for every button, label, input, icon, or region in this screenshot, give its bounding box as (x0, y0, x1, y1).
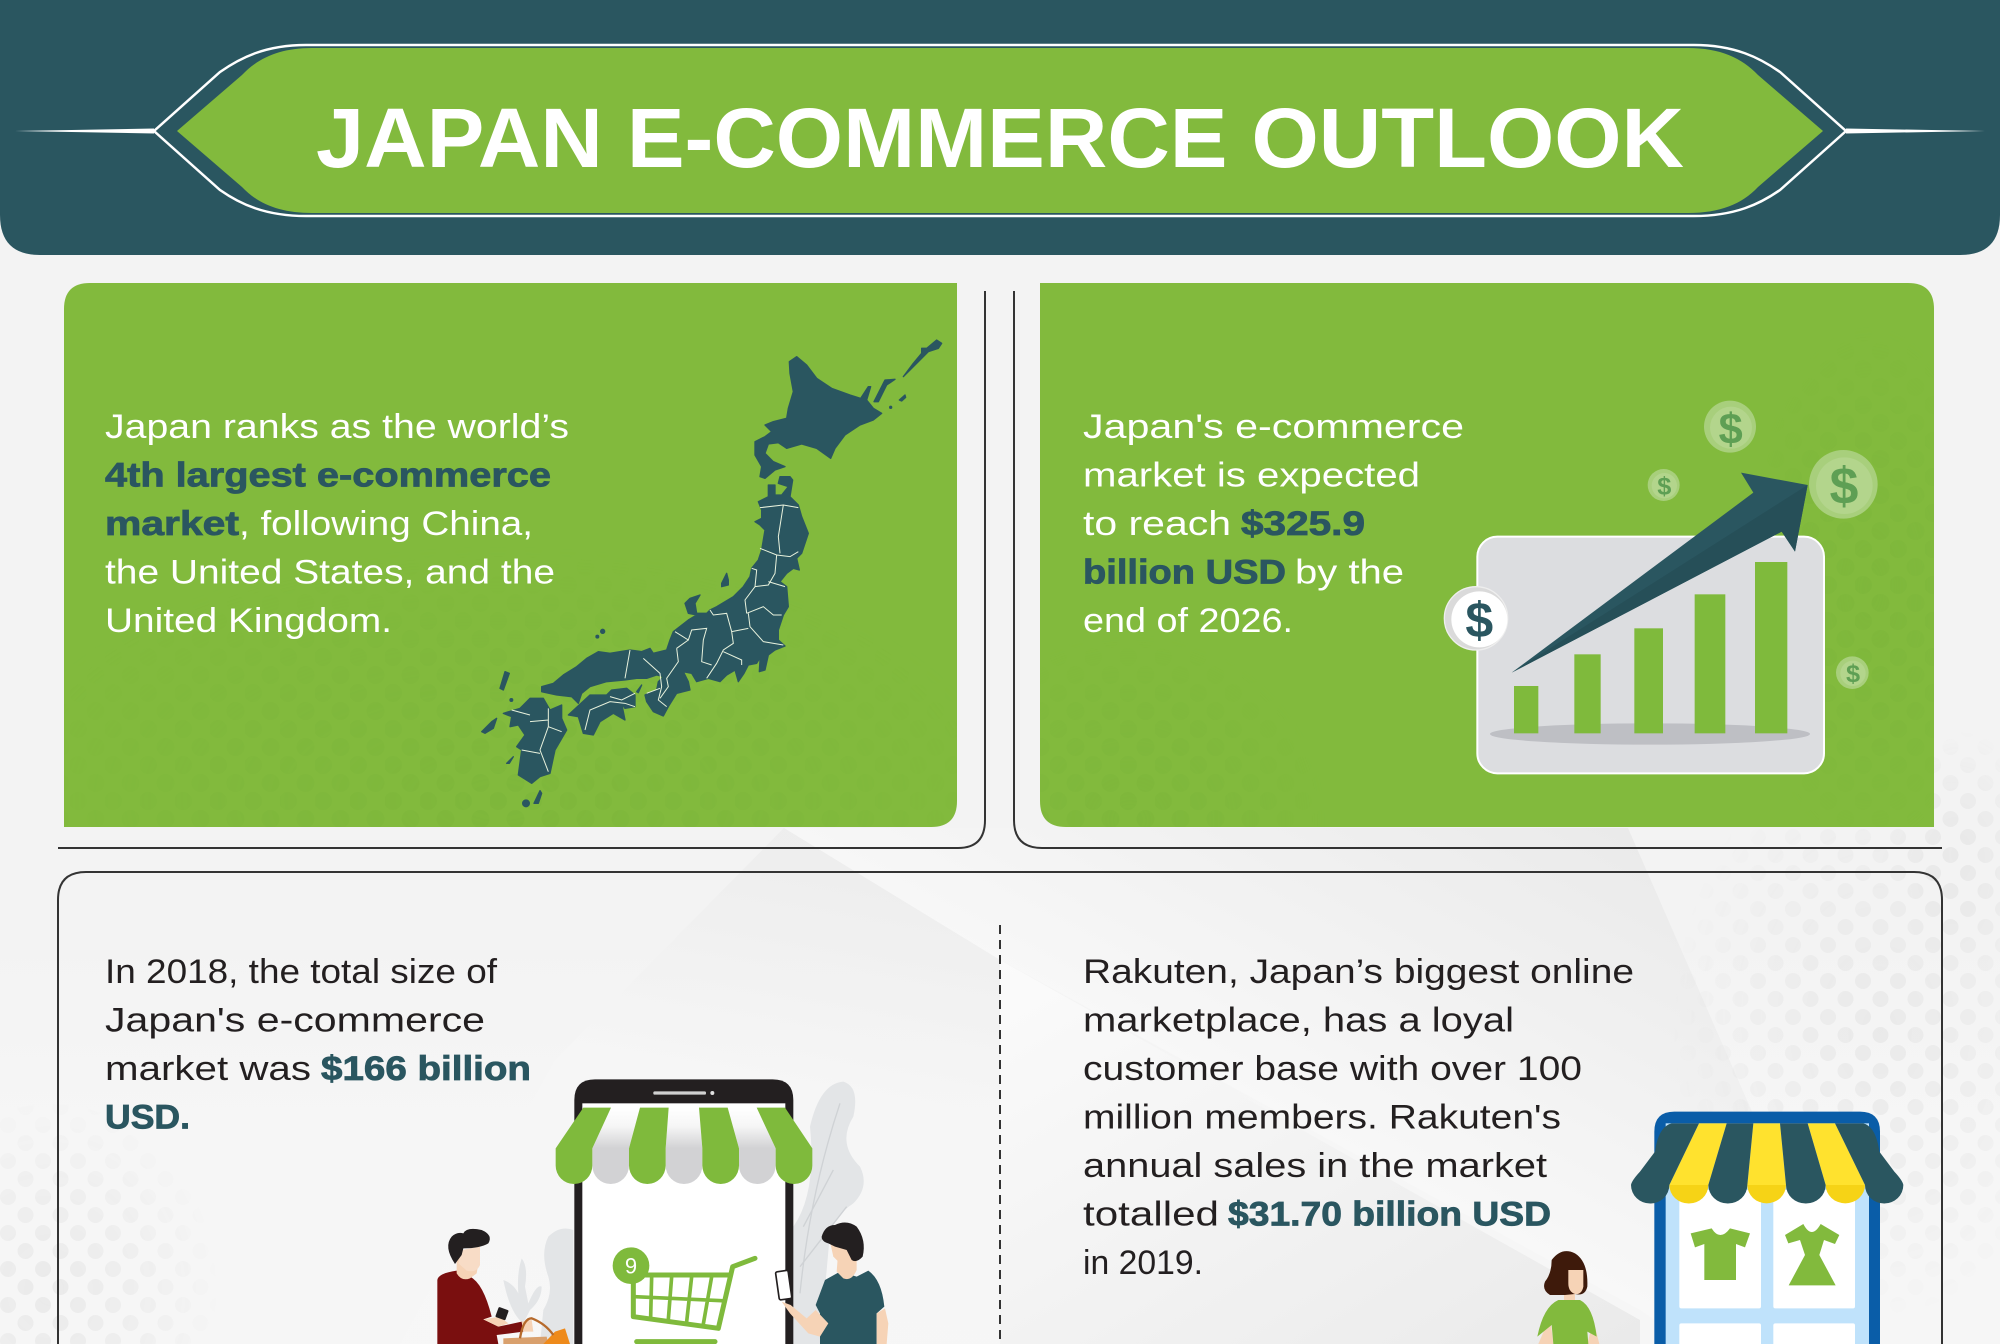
text: 2018 market size: $166 billion (321, 1050, 531, 1088)
header band (0, 0, 2000, 255)
frame lines (58, 291, 1942, 1344)
text: market forecast: to reach (1083, 505, 1231, 543)
text: Rakuten: customer base with over 100 (1083, 1050, 1582, 1088)
coins: light green: $ (1846, 660, 1860, 688)
text: market forecast: by the (1295, 554, 1404, 592)
text: market forecast: $325.9 (1241, 505, 1365, 543)
panel: market forecast (1040, 283, 1934, 827)
text: world rank: , following China, (239, 505, 533, 543)
panel: 2018 market size (105, 953, 888, 1344)
coins: light green (1648, 401, 1878, 689)
icon: dress (1785, 1224, 1839, 1285)
text: Rakuten: Rakuten, Japan’s biggest online (1083, 953, 1634, 991)
title banner (15, 45, 1985, 216)
arrow (1512, 473, 1808, 673)
text: 2018 market size: Japan's e-commerce (105, 1002, 485, 1040)
text: market forecast: billion USD (1083, 554, 1286, 592)
text: 2018 market size (105, 953, 531, 1136)
illustration: phone shop and shoppers (437, 1079, 888, 1344)
icon: t-shirt (1691, 1228, 1750, 1280)
text: Rakuten: $31.70 billion USD (1228, 1196, 1551, 1234)
text: 2018 market size: market was (105, 1050, 311, 1088)
text: world rank: the United States, and the (105, 554, 555, 592)
text: market forecast: Japan's e-commerce (1083, 408, 1464, 446)
coins: light green: $ (1719, 406, 1743, 454)
text: 2018 market size: USD. (105, 1098, 190, 1136)
coin: white: $ (1465, 592, 1493, 648)
coins: light green: $ (1657, 473, 1671, 501)
person: left shopper (437, 1229, 570, 1344)
text: market forecast: end of 2026. (1083, 602, 1293, 640)
cart (613, 1247, 755, 1342)
text: Rakuten: in 2019. (1083, 1244, 1203, 1282)
storefront (1654, 1112, 1880, 1344)
text: world rank: market (105, 505, 239, 543)
text: 2018 market size: In 2018, the total size of (105, 953, 498, 991)
text: market forecast (1083, 408, 1464, 640)
title text: JAPAN E-COMMERCE OUTLOOK (316, 91, 1684, 185)
text: Rakuten: million members. Rakuten's (1083, 1098, 1561, 1136)
cart: 9 (625, 1253, 637, 1278)
coins: light green: $ (1830, 456, 1858, 514)
text: market forecast: market is expected (1083, 456, 1420, 494)
text: Rakuten (1083, 953, 1634, 1282)
bars (1514, 562, 1787, 733)
chart: rising bars with arrow (1444, 401, 1878, 773)
illustration: online store (1537, 1112, 1903, 1344)
page background (38, 812, 1988, 1344)
text: world rank: 4th largest e-commerce (105, 456, 551, 494)
coin: white (1444, 587, 1508, 650)
text: Rakuten: totalled (1083, 1196, 1219, 1234)
awning: phone shop (556, 1108, 812, 1184)
person: woman (1537, 1251, 1599, 1344)
plants (503, 1082, 864, 1344)
phone (574, 1079, 793, 1344)
text: Rakuten: marketplace, has a loyal (1083, 1002, 1514, 1040)
text: world rank: Japan ranks as the world’s (105, 408, 569, 446)
map: Japan (482, 340, 942, 807)
awning: store (1631, 1123, 1903, 1203)
panel: world rank (64, 283, 957, 827)
text: world rank: United Kingdom. (105, 602, 392, 640)
person: right shopper (775, 1223, 888, 1344)
text: world rank (105, 408, 569, 640)
text: Rakuten: annual sales in the market (1083, 1147, 1548, 1185)
panel: Rakuten (1083, 953, 1903, 1344)
chart board (1477, 537, 1824, 773)
